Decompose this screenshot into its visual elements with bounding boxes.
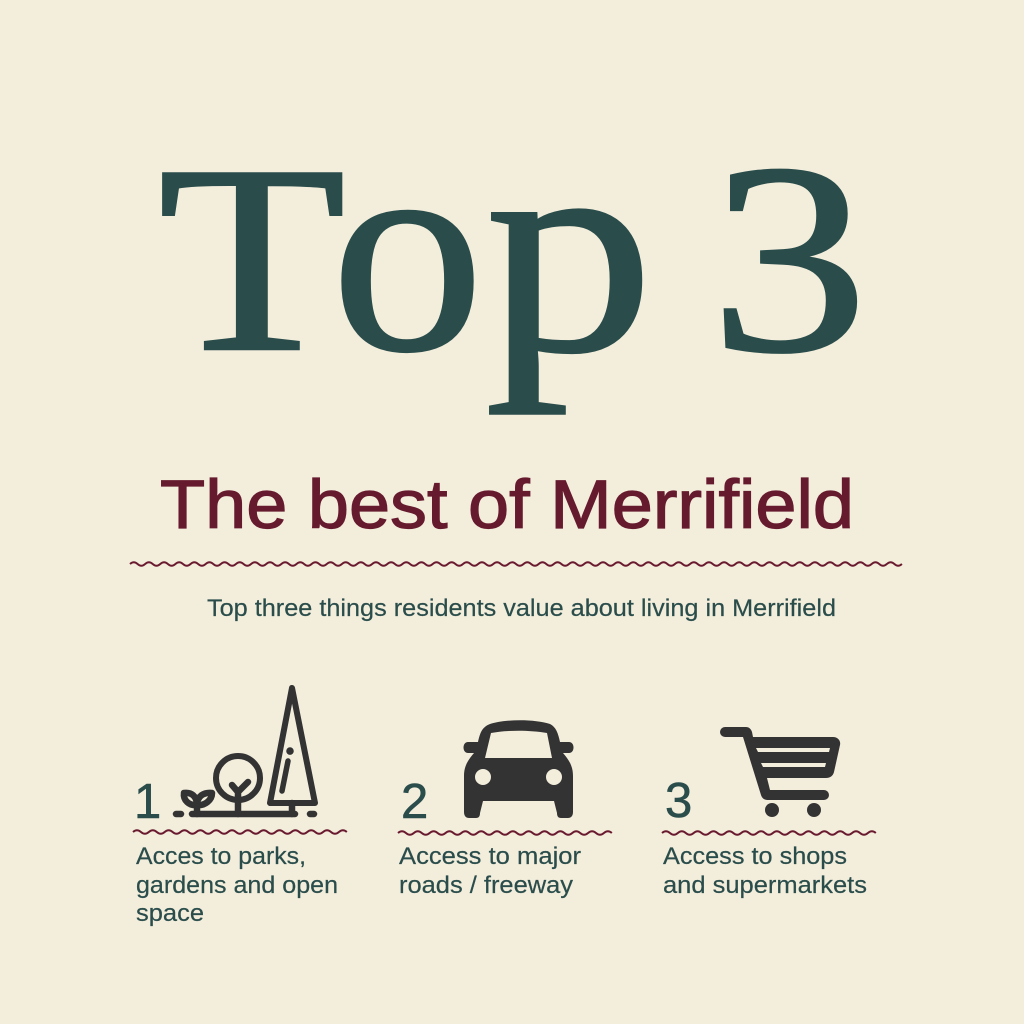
- item 3: shops: [662, 727, 876, 899]
- item 3: shops: and supermarkets: [663, 872, 867, 899]
- icon: trees and plant: [176, 688, 315, 814]
- item 2: roads: roads / freeway: [399, 872, 573, 899]
- item 2: roads: [398, 720, 612, 899]
- subtitle: The best of Merrifield: [160, 466, 854, 543]
- label 1: Acces to parks,: [136, 843, 306, 870]
- title: p: [485, 85, 654, 415]
- label 3: Access to shops: [663, 843, 847, 870]
- item 1: parks: gardens and open: [136, 872, 338, 899]
- icon: car: [464, 720, 574, 818]
- title: T: [158, 110, 346, 407]
- intro sentence: Top three things residents value about living in Merrifield: [207, 595, 836, 622]
- number 2: 2: [401, 775, 428, 829]
- title: [158, 85, 868, 415]
- number 3: 3: [665, 774, 692, 828]
- label 2: Access to major: [399, 843, 581, 870]
- item 1: parks: space: [136, 900, 204, 927]
- icon: shopping cart: [720, 727, 840, 817]
- item 1: parks: [133, 688, 347, 927]
- title: 3: [710, 108, 868, 409]
- title: o: [331, 89, 484, 413]
- number 1: 1: [134, 775, 161, 829]
